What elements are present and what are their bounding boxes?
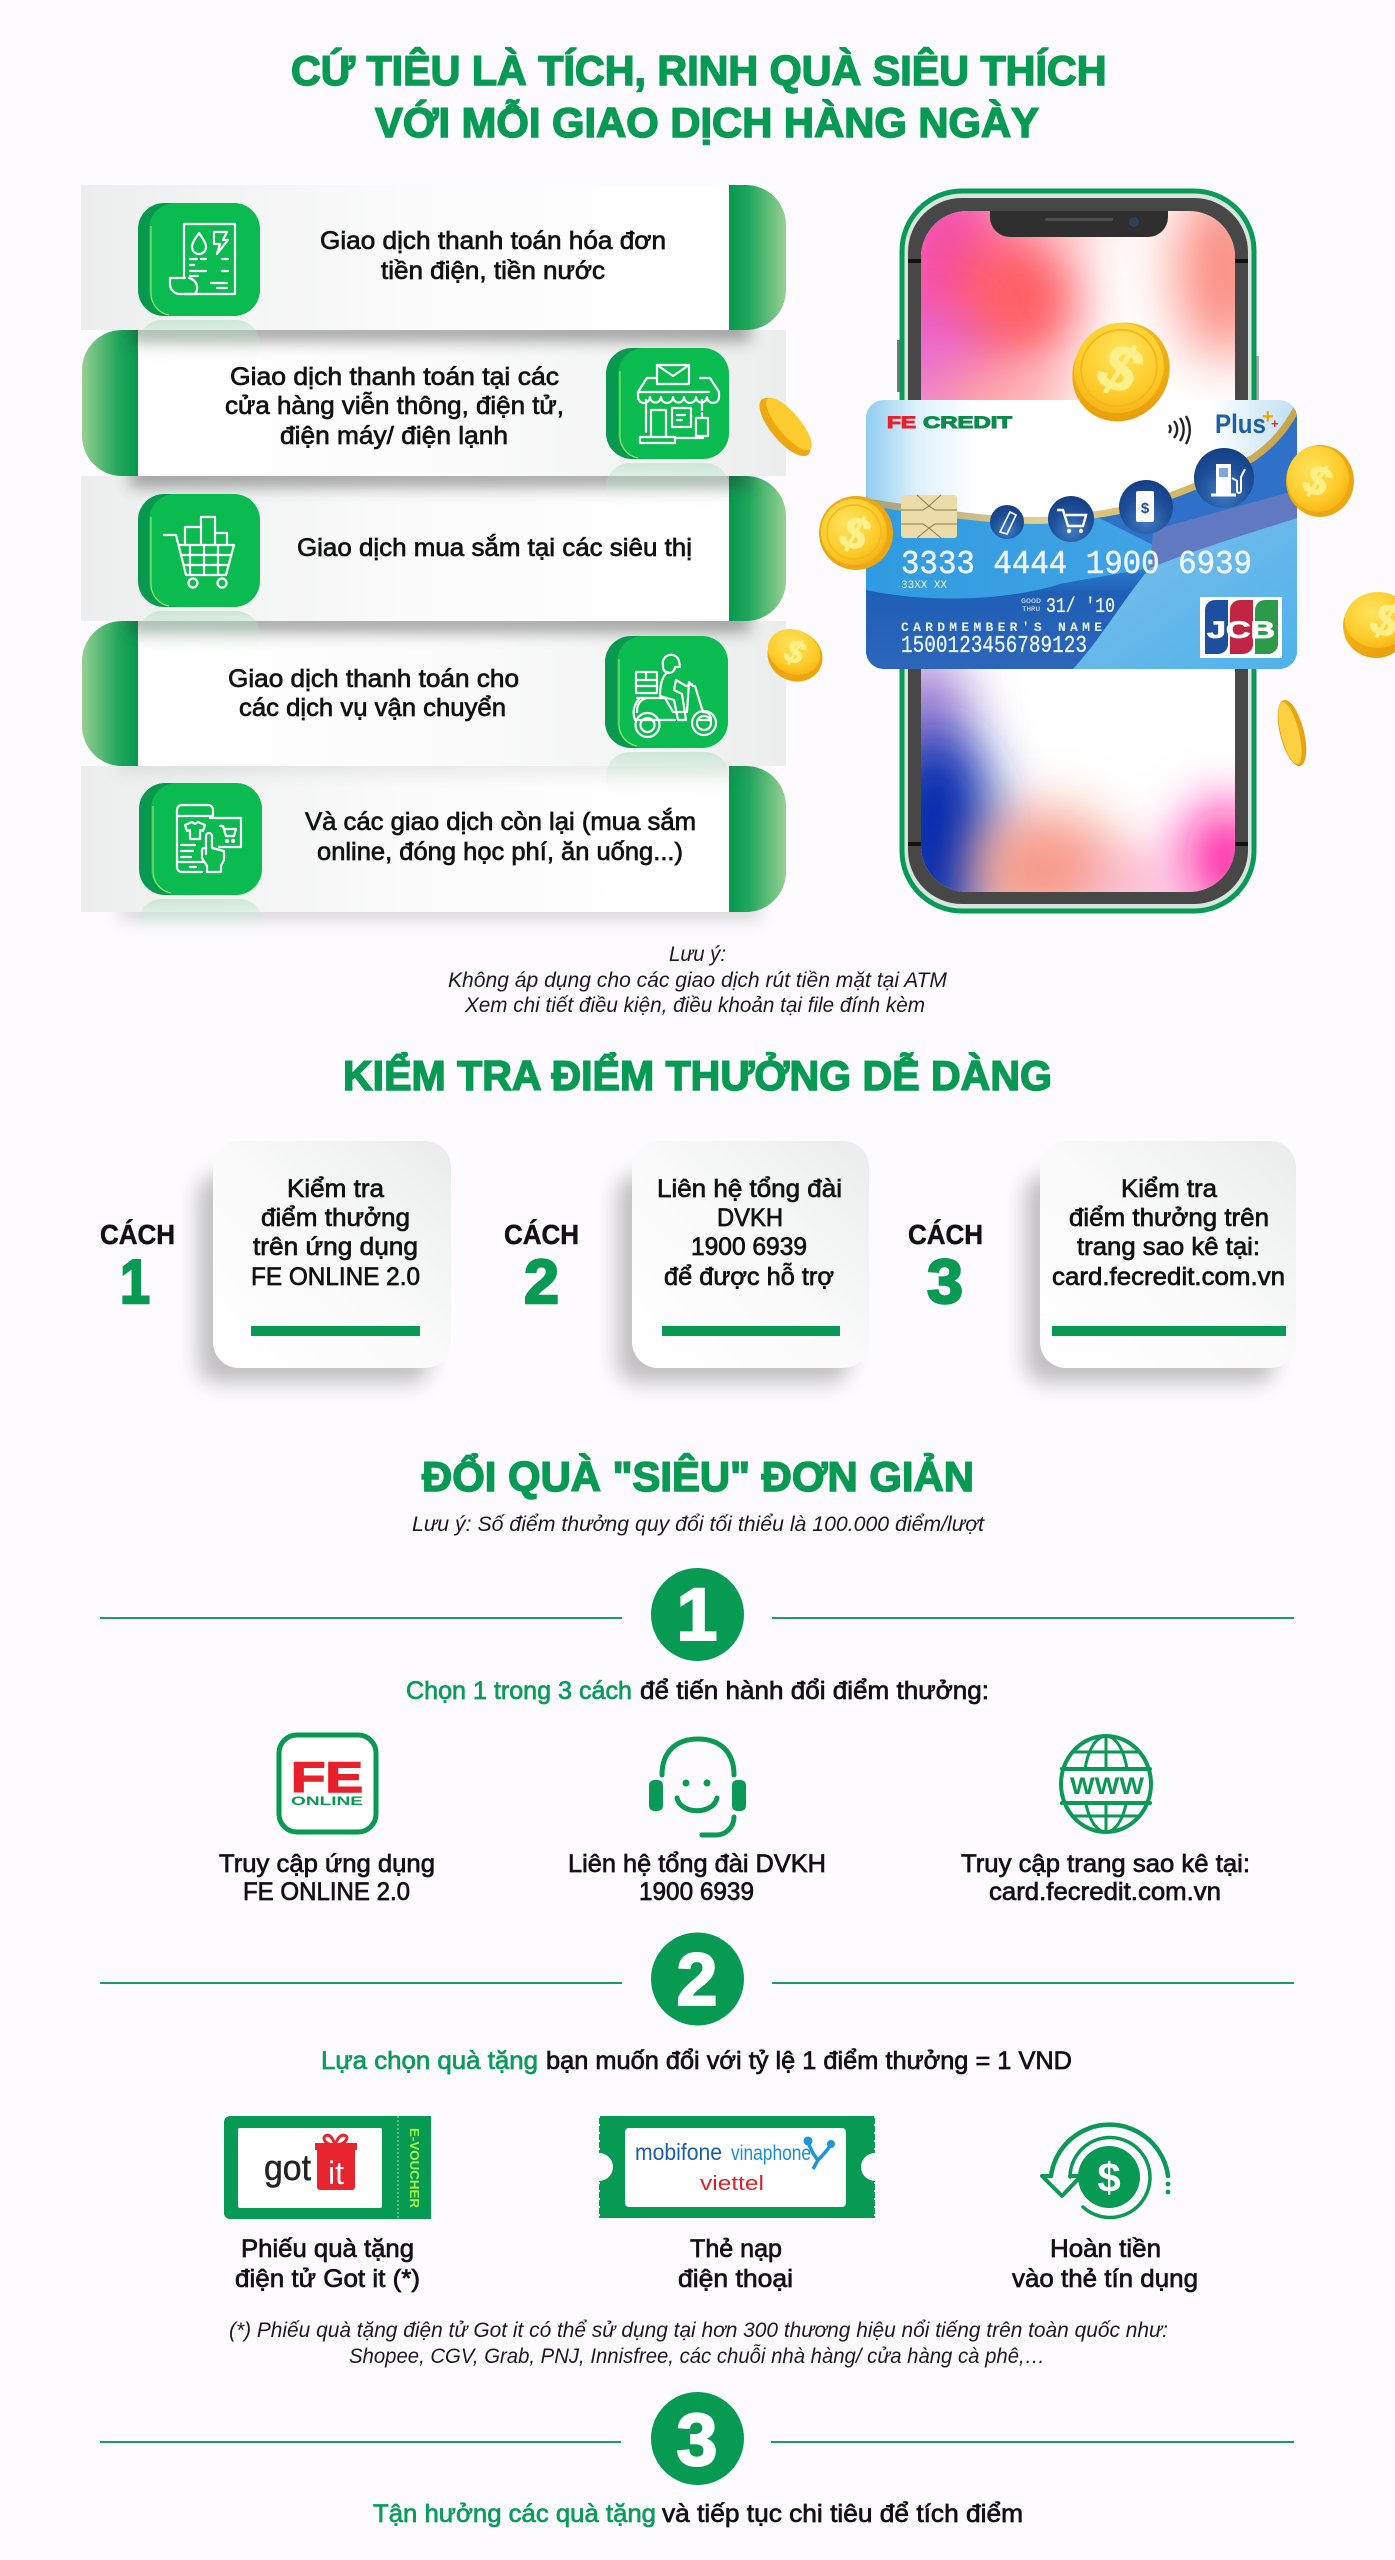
card logo: Plus: Plus — [1215, 409, 1266, 439]
contactless icon — [1169, 416, 1190, 444]
card logo: Plus: + — [1271, 416, 1279, 431]
text: cash back: vào thẻ tín dụng — [1012, 2265, 1198, 2293]
step 3 divider: 3 — [676, 2398, 718, 2481]
text: headset support — [568, 1850, 826, 1906]
text: bar 2: cửa hàng viễn thông, điện tử, — [225, 391, 564, 420]
text: bar 1: Giao dịch thanh toán hóa đơn — [320, 227, 666, 255]
card: way 2: để được hỗ trợ — [664, 1262, 834, 1291]
text: Got it e-voucher: Phiếu quà tặng — [241, 2235, 414, 2263]
title — [291, 46, 1106, 146]
card logo: FE CREDIT: CREDIT — [923, 413, 1013, 432]
icon: Got it e-voucher — [224, 2116, 431, 2219]
step 1 text: để tiến hành đổi điểm thưởng: — [640, 1677, 989, 1705]
card number and holder text: 31/ '10 — [1046, 596, 1115, 619]
note: minimum points: Lưu ý: Số điểm thưởng quy đổi tối thiểu là 100.000 điểm/lượt — [412, 1513, 985, 1536]
icon: FE Online: ONLINE — [291, 1794, 363, 1808]
card logo: FE CREDIT: FE — [887, 413, 916, 432]
step 1 divider — [100, 1568, 1294, 1661]
bar 4 — [82, 621, 786, 774]
card: way 2: 1900 6939 — [691, 1233, 807, 1261]
label: way 2: 2 — [524, 1248, 559, 1317]
icon: FE Online: FE — [291, 1754, 363, 1802]
label: way 3 — [908, 1219, 983, 1317]
label: way 2 — [504, 1219, 579, 1317]
step 1 divider: 1 — [676, 1573, 718, 1656]
phone — [897, 188, 1259, 914]
card logo: Plus: + — [1262, 406, 1274, 428]
label: way 1: CÁCH — [100, 1219, 175, 1250]
text: globe www: card.fecredit.com.vn — [989, 1878, 1221, 1906]
card: way 1: điểm thưởng — [261, 1204, 410, 1232]
text: bar 2: điện máy/ điện lạnh — [280, 422, 508, 450]
card: way 2 — [617, 1141, 869, 1383]
card number and holder text: GOOD — [1021, 598, 1042, 605]
text: bar 5: Và các giao dịch còn lại (mua sắm — [305, 807, 696, 836]
title: VỚI MỖI GIAO DỊCH HÀNG NGÀY — [375, 98, 1039, 146]
coin: large top: $ — [1088, 326, 1152, 410]
text: bar 4: các dịch vụ vận chuyển — [239, 694, 506, 722]
step 2 divider — [100, 1932, 1294, 2026]
icon: mobile shopping — [139, 783, 262, 895]
card background — [866, 400, 1297, 669]
icon: Got it e-voucher: it — [328, 2155, 344, 2191]
text: bar 1: tiền điện, tiền nước — [381, 257, 605, 285]
text: bar 5 — [305, 807, 696, 866]
text: globe www: Truy cập trang sao kê tại: — [961, 1850, 1250, 1878]
card number and holder text: 3333 4444 1900 6939 — [901, 546, 1252, 583]
card benefit icons — [990, 448, 1254, 542]
step 2 text — [321, 2047, 1072, 2075]
icon: globe www — [1061, 1736, 1151, 1832]
coin: upper left thin — [751, 390, 819, 464]
coin: right of card: $ — [1297, 454, 1338, 507]
coin: thin right — [1272, 697, 1312, 769]
step 2 divider: 2 — [676, 1938, 718, 2021]
icon: Got it e-voucher: got — [264, 2147, 311, 2188]
icon: globe www: WWW — [1070, 1773, 1144, 1800]
coin: far right — [1343, 591, 1395, 658]
coin: lower left — [759, 621, 831, 690]
coin: lower left: $ — [780, 632, 811, 672]
card: way 2: Liên hệ tổng đài — [657, 1175, 842, 1203]
icon: cash back: $ — [1097, 2154, 1121, 2201]
icon: phone top-up voucher: mobifone — [635, 2139, 722, 2165]
card number and holder text: 33XX XX — [901, 580, 947, 592]
step 2 text: Lựa chọn quà tặng — [321, 2047, 538, 2075]
card logo: JCB — [1200, 597, 1282, 658]
panel: ways to check points — [100, 1141, 1296, 1383]
card: way 3: trang sao kê tại: — [1077, 1233, 1260, 1261]
text: Got it e-voucher — [235, 2235, 420, 2293]
bar 5 — [81, 766, 786, 920]
label: way 3: 3 — [927, 1248, 963, 1317]
card number and holder text: CARDMEMBER'S NAME — [901, 620, 1102, 635]
label: way 1 — [100, 1219, 175, 1317]
heading: redeem: ĐỔI QUÀ "SIÊU" ĐƠN GIẢN — [422, 1451, 974, 1500]
phone notch — [990, 211, 1168, 237]
footnote: Got it: (*) Phiếu quà tặng điện tử Got it có thể sử dụng tại hơn 300 thương hiệu nổi tiếng trên toàn quốc như: — [229, 2319, 1168, 2342]
phone side buttons — [897, 340, 1259, 400]
label: way 1: 1 — [120, 1248, 150, 1317]
step 3 text: Tận hưởng các quà tặng — [373, 2500, 656, 2528]
card logo: JCB: JCB — [1207, 617, 1275, 644]
icon: phone top-up voucher — [585, 2116, 889, 2218]
card: way 3: Kiểm tra — [1121, 1175, 1217, 1203]
card number and holder text — [901, 546, 1252, 660]
icon: shopping cart — [138, 494, 260, 607]
text: bar 2 — [225, 363, 564, 450]
step 1 text — [406, 1677, 989, 1705]
icon: FE Online — [279, 1735, 376, 1832]
credit card — [866, 400, 1297, 669]
icon: headset support — [649, 1739, 746, 1835]
phone screen — [921, 211, 1235, 892]
bar 3 — [81, 476, 786, 632]
footnote: Got it — [229, 2319, 1168, 2368]
text: phone top-up voucher: Thẻ nạp — [690, 2235, 782, 2263]
panel: transaction bars — [81, 185, 786, 939]
icon reflections — [138, 320, 729, 939]
card: way 1: Kiểm tra — [287, 1175, 384, 1203]
icon: bill — [138, 203, 260, 316]
text: bar 1 — [320, 227, 666, 285]
heading: check points: KIỂM TRA ĐIỂM THƯỞNG DỄ DÀNG — [343, 1051, 1052, 1099]
bar 1 — [81, 185, 786, 341]
text: bar 3: Giao dịch mua sắm tại các siêu thị — [297, 533, 692, 562]
text: bar 2: Giao dịch thanh toán tại các — [230, 363, 559, 391]
coin: left of card — [819, 496, 893, 570]
note: conditions: Không áp dụng cho các giao dịch rút tiền mặt tại ATM — [448, 969, 947, 992]
text: phone top-up voucher: điện thoại — [678, 2265, 793, 2293]
icon: delivery scooter — [605, 636, 728, 748]
note: conditions: Lưu ý: — [669, 943, 726, 966]
note: conditions — [448, 943, 947, 1017]
step 3 divider — [100, 2392, 1294, 2485]
card number and holder text: THRU — [1022, 606, 1040, 613]
card: way 2: DVKH — [717, 1204, 783, 1232]
icon: Got it e-voucher: E-VOUCHER — [407, 2128, 422, 2209]
label: way 3: CÁCH — [908, 1219, 983, 1250]
card number and holder text: 1500123456789123 — [901, 633, 1087, 660]
text: phone top-up voucher — [678, 2235, 793, 2293]
card: way 1: FE ONLINE 2.0 — [251, 1263, 420, 1291]
phone frame — [902, 191, 1254, 911]
text: cash back — [1012, 2235, 1198, 2293]
footnote: Got it: Shopee, CGV, Grab, PNJ, Innisfree, các chuỗi nhà hàng/ cửa hàng cà phê,… — [349, 2345, 1045, 2368]
text: FE Online: Truy cập ứng dụng — [219, 1850, 435, 1878]
text: bar 4: Giao dịch thanh toán cho — [228, 665, 519, 693]
card logo: FE CREDIT — [887, 413, 1013, 432]
step 1 text: Chọn 1 trong 3 cách — [406, 1677, 632, 1705]
card: way 3: điểm thưởng trên — [1069, 1204, 1269, 1232]
text: bar 4 — [228, 665, 519, 722]
card: way 1: trên ứng dụng — [253, 1233, 418, 1261]
text: globe www — [961, 1850, 1250, 1906]
text: bar 5: online, đóng học phí, ăn uống...) — [317, 838, 683, 866]
card: way 1 — [198, 1141, 451, 1383]
text: FE Online: FE ONLINE 2.0 — [243, 1878, 410, 1906]
step 3 text — [373, 2500, 1023, 2528]
card: way 3 — [1025, 1141, 1296, 1383]
text: headset support: Liên hệ tổng đài DVKH — [568, 1850, 826, 1878]
title: CỨ TIÊU LÀ TÍCH, RINH QUÀ SIÊU THÍCH — [291, 46, 1106, 94]
coin: large top — [1052, 303, 1190, 441]
step 3 text: và tiếp tục chi tiêu để tích điểm — [662, 2500, 1023, 2528]
text: headset support: 1900 6939 — [639, 1878, 754, 1906]
icon: cash back — [1042, 2125, 1170, 2217]
icon: phone top-up voucher: viettel — [700, 2173, 764, 2195]
card: way 3: card.fecredit.com.vn — [1052, 1263, 1285, 1291]
icon: phone top-up voucher: vinaphone — [731, 2142, 811, 2165]
step 2 text: bạn muốn đổi với tỷ lệ 1 điểm thưởng = 1 VND — [546, 2047, 1072, 2075]
coin: left of card: $ — [834, 504, 876, 562]
card benefit icons: $ — [1141, 500, 1150, 517]
label: way 2: CÁCH — [504, 1219, 579, 1250]
text: Got it e-voucher: điện tử Got it (*) — [235, 2265, 420, 2293]
icon: store — [606, 348, 729, 459]
bar 2 — [82, 330, 786, 487]
text: FE Online — [219, 1850, 435, 1906]
coin: right of card — [1286, 445, 1354, 517]
note: conditions: Xem chi tiết điều kiện, điều khoản tại file đính kèm — [464, 994, 925, 1017]
text: cash back: Hoàn tiền — [1050, 2235, 1161, 2263]
card chip — [901, 495, 957, 538]
